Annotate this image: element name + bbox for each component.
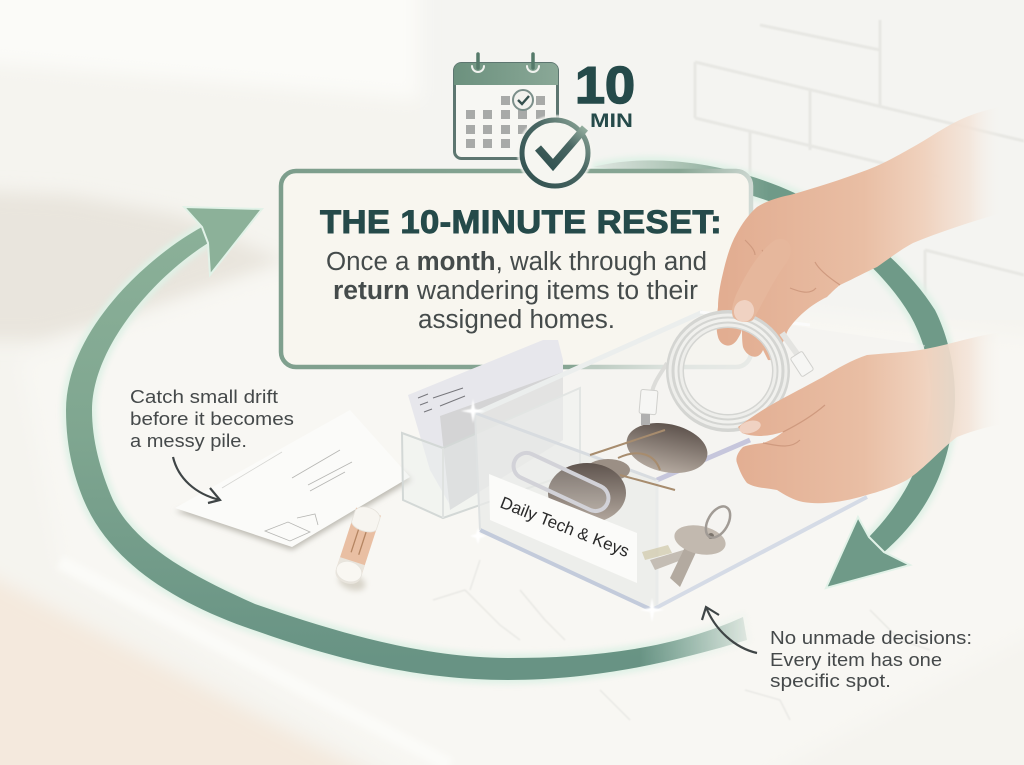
arrow: to envelope xyxy=(173,457,220,503)
arrow: to bin xyxy=(702,607,757,653)
callout: catch small drift xyxy=(130,386,294,503)
10 min badge: MIN xyxy=(590,110,633,132)
body text: assigned homes. xyxy=(418,306,615,334)
callout: catch small drift: Catch small drift xyxy=(130,386,278,407)
body text xyxy=(326,248,707,334)
sparkles xyxy=(461,399,664,622)
clear bin xyxy=(461,312,925,622)
sunglasses xyxy=(548,416,712,523)
icon: large check circle xyxy=(517,115,593,191)
body text: Once a month, walk through and xyxy=(326,248,707,276)
cycle ring glow xyxy=(66,227,747,680)
keys xyxy=(642,502,735,587)
white cable xyxy=(639,315,814,427)
10 min badge: 10 xyxy=(575,57,635,115)
panel: main message xyxy=(281,171,751,367)
body text: return wandering items to their xyxy=(333,277,699,305)
callout: no unmade decisions: Every item has one xyxy=(770,649,942,670)
label: Daily Tech & Keys xyxy=(489,474,637,583)
heading: THE 10-MINUTE RESET: xyxy=(320,204,722,240)
arrow: left ring sweep xyxy=(66,207,747,680)
callout: no unmade decisions xyxy=(702,607,972,691)
icon: calendar xyxy=(454,54,558,158)
hand: lower xyxy=(736,332,1005,503)
hand: thumb xyxy=(731,239,791,324)
lip balm tube xyxy=(331,504,389,594)
letter holder with papers xyxy=(402,340,580,518)
icon: small check badge xyxy=(513,90,533,110)
envelope xyxy=(175,410,412,550)
callout: no unmade decisions: specific spot. xyxy=(770,670,891,691)
arrow: right ring sweep xyxy=(593,160,955,588)
label: Daily Tech & Keys: Daily Tech & Keys xyxy=(498,493,632,561)
callout: no unmade decisions: No unmade decisions: xyxy=(770,627,972,648)
callout: catch small drift: a messy pile. xyxy=(130,430,247,451)
callout: catch small drift: before it becomes xyxy=(130,408,294,429)
hand: upper xyxy=(716,105,1005,360)
bin handle cutout xyxy=(509,449,613,515)
